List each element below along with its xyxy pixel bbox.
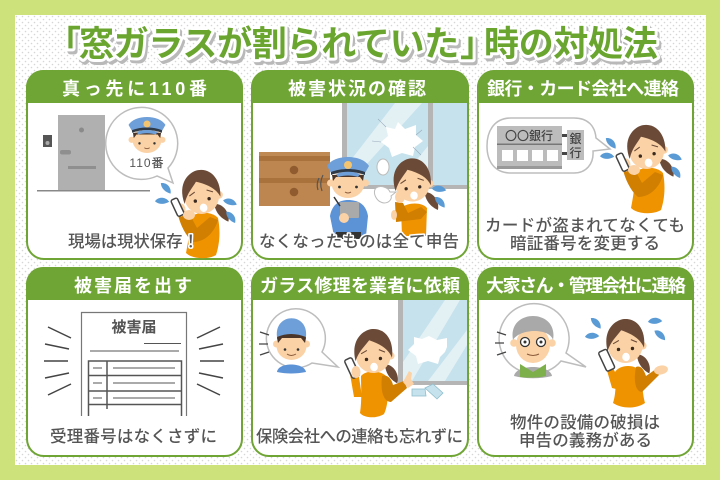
caption: change PIN bbox=[485, 215, 685, 253]
panel: check damage bbox=[251, 70, 469, 259]
header: file damage report bbox=[26, 267, 243, 300]
caption: duty to report damage: 物件の設備の破損は bbox=[510, 413, 660, 432]
header: contact landlord bbox=[477, 267, 694, 300]
title: 窓ガラスが割られていた bbox=[79, 25, 459, 64]
panel: call 110 first bbox=[26, 70, 243, 259]
caption: duty to report damage: 申告の義務がある bbox=[519, 430, 652, 450]
title: 窓ガラスが割られていた bbox=[81, 28, 461, 67]
speech bubble: landlord bbox=[495, 304, 586, 378]
panel: file damage report bbox=[26, 267, 243, 456]
icon: emphasis rays left bbox=[44, 327, 71, 395]
caption: preserve the scene: 現場は現状保存！ bbox=[68, 232, 199, 251]
title: 時の対処法 bbox=[486, 28, 660, 67]
caption: change PIN: カードが盗まれてなくても bbox=[485, 215, 685, 235]
caption: change PIN: 暗証番号を変更する bbox=[510, 234, 660, 253]
panel: contact bank bbox=[477, 70, 694, 259]
icon: chest of drawers bbox=[259, 152, 330, 206]
title: 」 bbox=[460, 25, 495, 64]
icon: report form: 被害届 bbox=[111, 319, 157, 336]
title: 」 bbox=[462, 28, 497, 67]
character: woman on phone bbox=[155, 166, 239, 258]
title bbox=[46, 25, 660, 67]
caption: keep receipt number: 受理番号はなくさずに bbox=[50, 427, 217, 446]
caption: duty to report damage bbox=[510, 413, 660, 450]
title: 「 bbox=[46, 25, 81, 64]
character: woman worried bbox=[391, 156, 448, 236]
heading: file damage report: 被害届を出す bbox=[74, 276, 192, 296]
panel: request glass repair bbox=[251, 267, 469, 456]
character: police officer bbox=[317, 157, 369, 239]
speech bubble: police 110 bbox=[106, 107, 178, 183]
heading: call 110 first: 真っ先に110番 bbox=[62, 79, 207, 99]
character: woman on phone shrugging bbox=[584, 316, 669, 408]
caption: report everything missing: なくなったものは全て申告 bbox=[259, 232, 459, 251]
character: woman on phone pointing bbox=[344, 327, 414, 417]
heading: request glass repair: ガラス修理を業者に依頼 bbox=[260, 276, 460, 296]
speech bubble: bank: 行 bbox=[569, 146, 582, 160]
panel: contact landlord bbox=[477, 267, 694, 456]
caption: contact insurance: 保険会社への連絡も忘れずに bbox=[256, 427, 463, 446]
title: 窓ガラスが割られていた bbox=[79, 25, 459, 64]
speech bubble: bank bbox=[487, 118, 610, 173]
speech bubble: bank: 〇〇銀行 bbox=[505, 128, 553, 143]
icon: broken window bbox=[342, 103, 467, 203]
icon: broken window bbox=[398, 300, 467, 399]
icon: report form bbox=[82, 312, 186, 416]
heading: check damage: 被害状況の確認 bbox=[288, 79, 426, 99]
heading: contact bank: 銀行・カード会社へ連絡 bbox=[487, 79, 679, 99]
title: 」 bbox=[460, 25, 495, 64]
speech bubble: bank: 銀 bbox=[569, 131, 582, 146]
header: check damage bbox=[251, 70, 469, 103]
icon: emphasis rays right bbox=[197, 327, 224, 395]
heading: contact landlord: 大家さん・管理会社に連絡 bbox=[486, 275, 686, 296]
speech bubble: police 110: 110番 bbox=[129, 156, 165, 170]
header: contact bank bbox=[477, 70, 694, 103]
speech bubble: repair worker bbox=[259, 309, 338, 374]
title: 時の対処法 bbox=[484, 25, 658, 64]
title: 「 bbox=[48, 28, 83, 67]
icon: door bbox=[37, 115, 150, 192]
header: call 110 first bbox=[26, 70, 243, 103]
title: 「 bbox=[46, 25, 81, 64]
header: request glass repair bbox=[251, 267, 469, 300]
character: woman on phone bbox=[600, 121, 684, 213]
title: 時の対処法 bbox=[484, 25, 658, 64]
